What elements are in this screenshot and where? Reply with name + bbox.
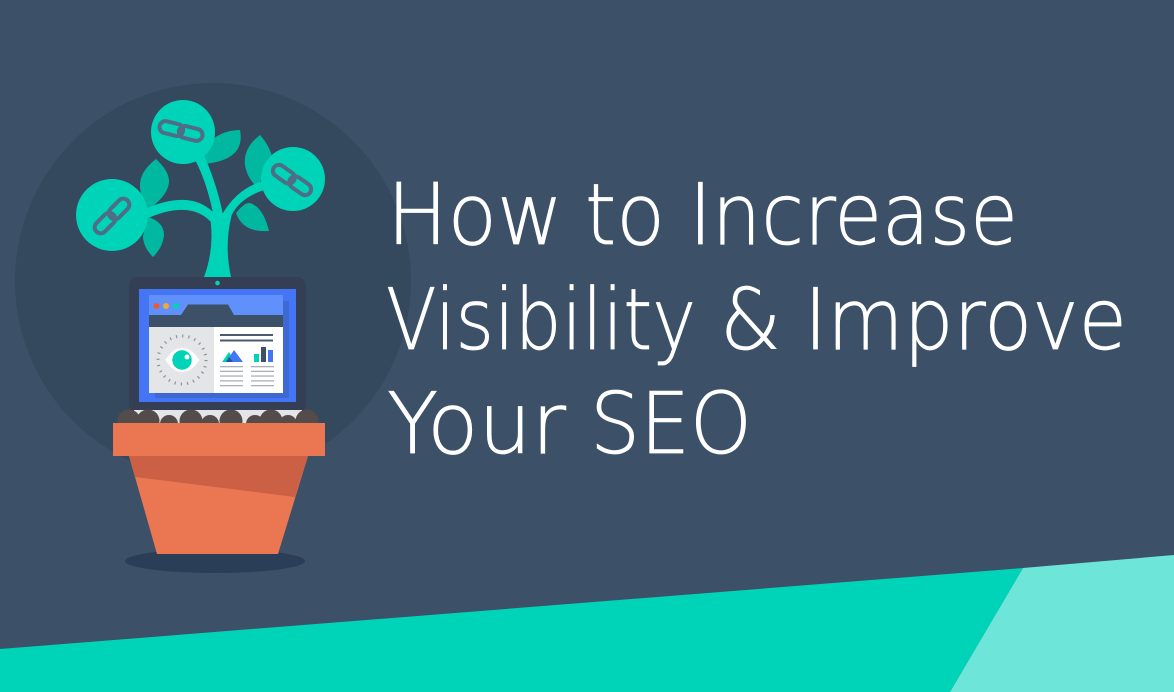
keyboard base: [134, 410, 302, 424]
title: Visibility: [386, 271, 696, 370]
title: How: [387, 166, 563, 265]
laptop bezel: [129, 277, 306, 413]
soil: [118, 410, 318, 433]
title: &: [720, 271, 781, 370]
plant: [76, 100, 325, 277]
mountain chart icon: [222, 350, 243, 362]
bottom teal band: [0, 555, 1174, 692]
screen: [139, 289, 296, 402]
title: Improve: [804, 271, 1127, 370]
webcam: [215, 281, 220, 285]
title: SEO: [590, 375, 752, 474]
pot shadow: [125, 549, 305, 573]
title: [386, 166, 1127, 474]
text lines: [220, 366, 274, 386]
link circle: top: [151, 100, 215, 164]
leaves: [140, 130, 273, 257]
title: to: [585, 166, 665, 265]
title: Increase: [689, 166, 1018, 265]
background circle: [15, 83, 411, 479]
link circle: left: [76, 179, 148, 251]
flower pot: [113, 423, 325, 554]
stems and trunk: [147, 155, 264, 277]
eye icon: [158, 336, 206, 384]
browser window: [149, 295, 283, 393]
link circle: right: [261, 147, 325, 211]
laptop: [129, 277, 306, 424]
bar chart icon: [254, 347, 273, 362]
window shadow: [155, 301, 289, 398]
title: Your: [387, 375, 566, 474]
heading lines: [220, 334, 273, 342]
